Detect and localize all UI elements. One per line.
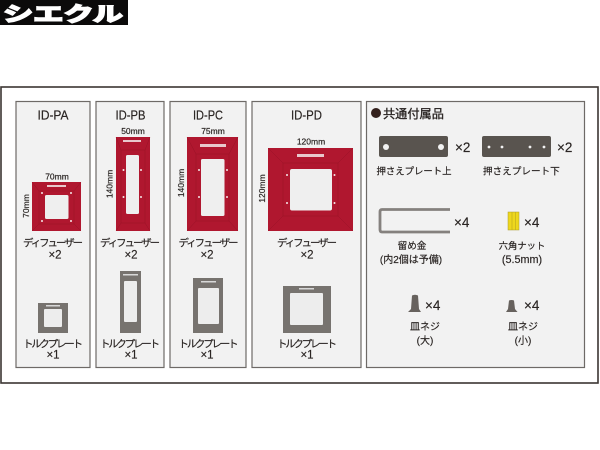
part: retaining clip: [380, 210, 470, 266]
panel: ID-PA: ×2: [48, 250, 62, 262]
heading: common accessories: 共通付属品: [383, 107, 444, 121]
part: hex nut: ×4: [524, 215, 540, 230]
part: countersunk screw large: ×4: [425, 298, 441, 313]
part: retaining clip: (内2個は予備): [380, 253, 442, 266]
diffuser: ID-PC: [187, 137, 238, 231]
diffuser: ID-PB: [116, 137, 150, 231]
dimension: width 120mm: 120mm: [297, 136, 325, 146]
part: countersunk screw large: [408, 295, 441, 347]
dimension: height 140mm: 140mm: [104, 170, 114, 198]
label: torque plate x1: トルクプレート: [23, 338, 83, 350]
diffuser: ID-PA: [32, 182, 81, 231]
panel: ID-PD: ×1: [300, 350, 314, 362]
part: upper press plate: ×2: [455, 140, 470, 155]
part: countersunk screw small: [506, 298, 540, 347]
logo: Shiecle: [0, 0, 128, 26]
panel: ID-PC: [170, 102, 246, 368]
dimension: height 70mm: 70mm: [21, 194, 31, 218]
part: countersunk screw large: 皿ネジ: [410, 321, 440, 333]
panel: ID-PD: ×2: [300, 250, 314, 262]
part: retaining clip: 留め金: [398, 240, 427, 252]
part: countersunk screw small: (小): [515, 335, 531, 347]
label: torque plate x1: トルクプレート: [178, 338, 238, 350]
dimension: height 120mm: 120mm: [257, 174, 267, 203]
outer frame: [1, 87, 598, 383]
part: hex nut: (5.5mm): [502, 254, 542, 266]
label: torque plate x1: トルクプレート: [277, 338, 337, 350]
torque plate: ID-PD: [283, 286, 331, 333]
part: retaining clip: ×4: [454, 215, 470, 230]
panel: ID-PD: [252, 102, 361, 368]
torque plate: ID-PB: [120, 271, 141, 333]
panel: ID-PB: ×1: [124, 350, 138, 362]
label: torque plate x1: トルクプレート: [100, 338, 160, 350]
panel: ID-PA: [16, 102, 90, 368]
label: diffuser x2: ディフューザー: [23, 236, 83, 250]
dimension: width 75mm: 75mm: [201, 126, 225, 136]
heading: ID-PB: ID-PB: [116, 108, 146, 122]
part: countersunk screw small: ×4: [524, 298, 540, 313]
diffuser: ID-PD: [268, 148, 353, 231]
panel: ID-PC: ×2: [200, 250, 214, 262]
panel: ID-PA: ×1: [46, 350, 60, 362]
heading: ID-PC: ID-PC: [193, 108, 223, 122]
dimension: width 50mm: 50mm: [121, 126, 145, 136]
dimension: height 140mm: 140mm: [176, 169, 186, 197]
torque plate: ID-PA: [38, 303, 68, 333]
label: diffuser x2: ディフューザー: [178, 236, 238, 250]
logo: Shiecle: シエクル: [3, 3, 123, 26]
panel: ID-PB: ×2: [124, 250, 138, 262]
part: countersunk screw small: 皿ネジ: [508, 321, 538, 333]
label: diffuser x2: ディフューザー: [100, 236, 160, 250]
part: hex nut: 六角ナット: [499, 240, 545, 251]
part: lower press plate: 押さえプレート下: [483, 166, 560, 178]
label: diffuser x2: ディフューザー: [277, 236, 337, 250]
part: lower press plate: ×2: [557, 140, 572, 155]
part: hex nut: [499, 212, 545, 266]
panel: ID-PB: [96, 102, 164, 368]
part: upper press plate: [376, 136, 470, 176]
panel: ID-PC: ×1: [200, 350, 214, 362]
heading: ID-PD: ID-PD: [291, 108, 322, 122]
part: countersunk screw large: (大): [417, 334, 433, 347]
torque plate: ID-PC: [193, 278, 223, 333]
part: lower press plate: [482, 136, 572, 178]
panel: common accessories: [366, 102, 584, 368]
part: upper press plate: 押さえプレート上: [376, 166, 452, 176]
dimension: width 70mm: 70mm: [45, 172, 69, 182]
heading: ID-PA: ID-PA: [38, 108, 69, 122]
